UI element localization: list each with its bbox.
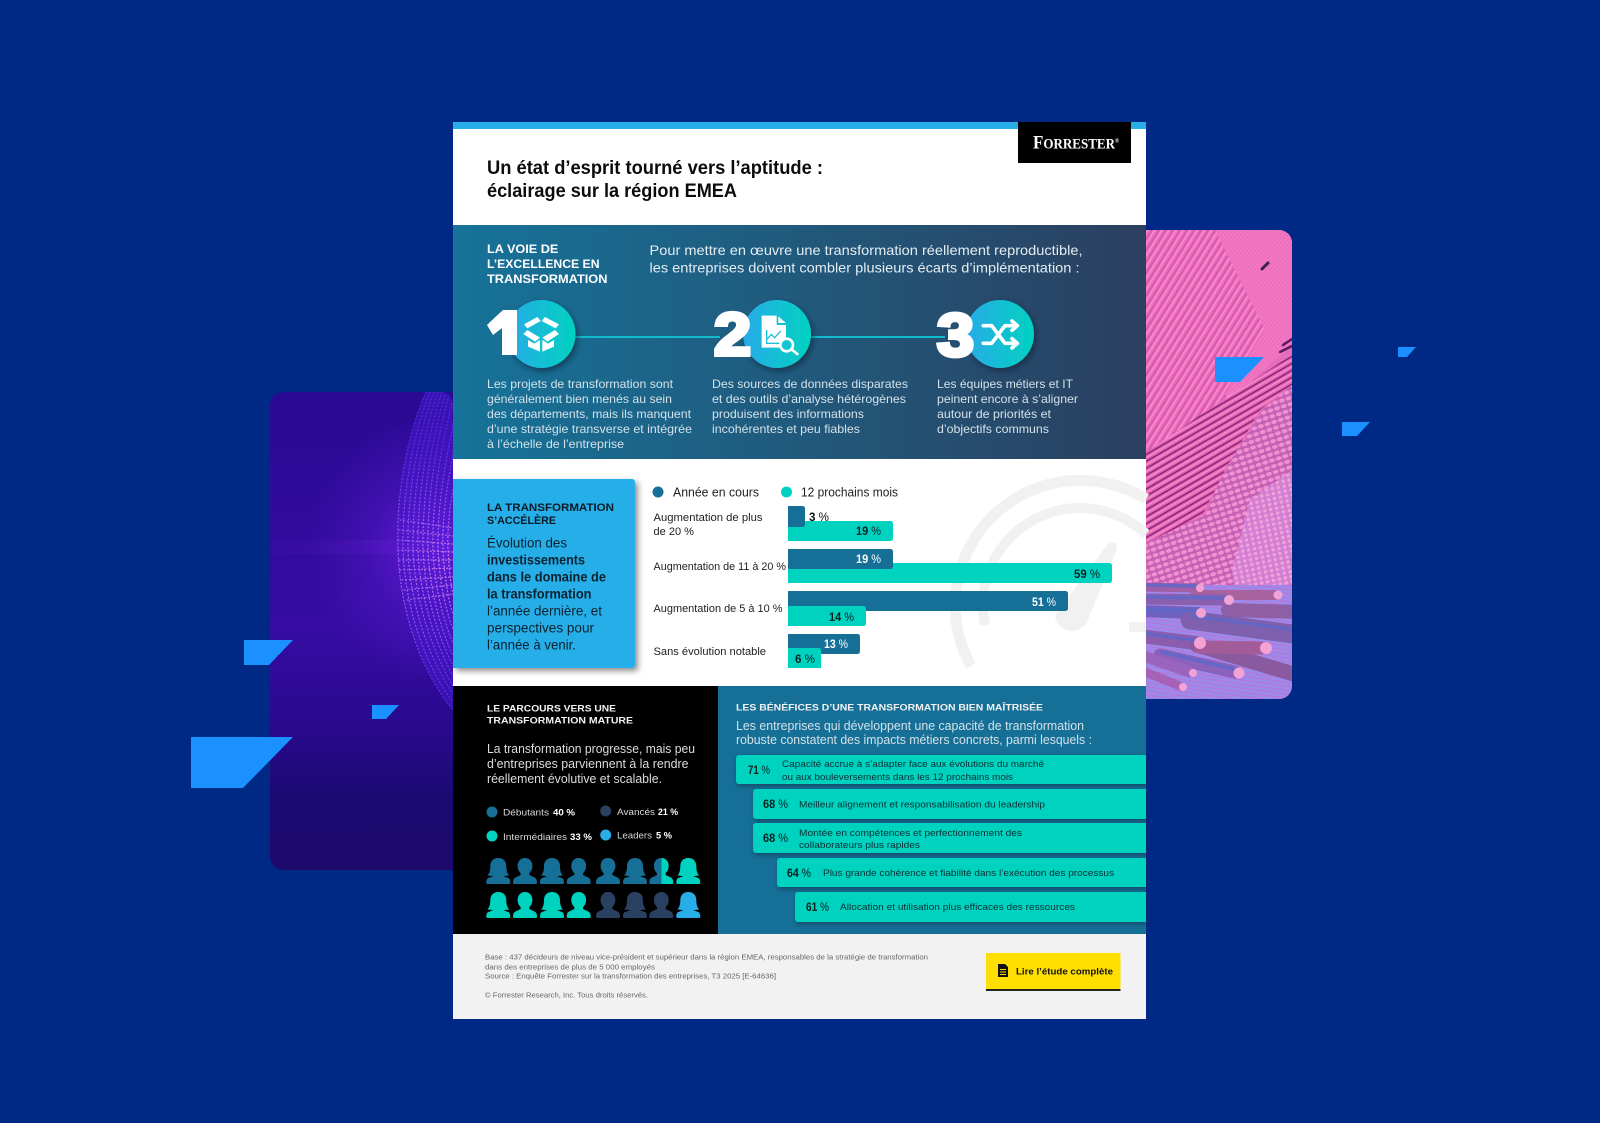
step 1 icon: 1 (487, 301, 517, 368)
benefit labels: Plus grande cohérence et fiabilité dans l’exécution des processus (823, 868, 1114, 879)
row labels (654, 512, 786, 658)
legend: Avancés (617, 807, 655, 818)
bar values (795, 510, 1100, 666)
heading: la voie: TRANSFORMATION (487, 272, 608, 286)
button: read full study (986, 953, 1120, 991)
intro text: les entreprises doivent combler plusieurs écarts d’implémentation : (650, 260, 1080, 276)
benefit labels: Meilleur alignement et responsabilisation du leadership (799, 800, 1045, 810)
bar values: 19 % (856, 552, 881, 566)
footnotes (485, 952, 928, 1000)
step 1 text: Les projets de transformation sont (487, 377, 674, 391)
row labels: Sans évolution notable (654, 646, 766, 658)
legend: 5 % (656, 830, 673, 842)
panel: maturity journey (453, 686, 718, 934)
body text: d’entreprises parviennent à la rendre (487, 757, 689, 771)
benefit labels: Allocation et utilisation plus efficaces des ressources (840, 902, 1075, 913)
legend: 21 % (658, 807, 679, 818)
chart legend: 12 prochains mois (801, 486, 898, 500)
intro text: robuste constatent des impacts métiers concrets, parmi lesquels : (736, 733, 1092, 747)
footnotes: © Forrester Research, Inc. Tous droits réservés. (485, 990, 648, 1000)
bars (788, 521, 893, 541)
intro text (736, 719, 1092, 747)
heading: S’ACCÉLÈRE (487, 514, 556, 527)
intro text: Les entreprises qui développent une capacité de transformation (736, 719, 1084, 733)
step 1 text: à l’échelle de l’entreprise (487, 437, 624, 451)
benefit percentages (748, 765, 829, 914)
body text: dans le domaine de (487, 570, 606, 584)
body text: investissements (487, 552, 585, 568)
body text (487, 536, 606, 652)
body text: la transformation (487, 586, 592, 602)
footnotes: dans des entreprises de plus de 5 000 employés (485, 962, 655, 972)
decorative blue shapes (191, 347, 1416, 788)
bar values: 14 % (829, 610, 854, 624)
step 2 text: produisent des informations (712, 407, 864, 421)
step 3 text: d’objectifs communs (937, 422, 1049, 436)
benefit labels (782, 759, 1114, 913)
bar values: 3 % (809, 510, 829, 524)
benefit labels: collaborateurs plus rapides (799, 840, 920, 851)
connector lines (570, 336, 945, 338)
step 3 icon (937, 300, 1034, 369)
body text: l’année à venir. (487, 638, 576, 652)
step 2 icon: 2 (714, 301, 751, 368)
chart legend (652, 486, 898, 500)
step 3 text (937, 377, 1078, 436)
row labels: Augmentation de 11 à 20 % (654, 561, 786, 573)
legend: Intermédiaires (503, 832, 567, 843)
title: éclairage sur la région EMEA (487, 181, 737, 202)
step 2 text: incohérentes et peu fiables (712, 422, 860, 436)
benefit labels: ou aux bouleversements dans les 12 prochains mois (782, 772, 1013, 783)
row labels: Augmentation de 5 à 10 % (654, 603, 783, 615)
footer (453, 934, 1146, 1019)
button: read full study: Lire l’étude complète (1016, 966, 1113, 978)
bar chart: investment change (654, 506, 1112, 668)
intro text (650, 242, 1082, 276)
legend: 33 % (570, 832, 593, 843)
step 3 icon: 3 (937, 302, 974, 369)
benefit percentages: 71 % (748, 765, 770, 777)
panel: path to transformation excellence (453, 225, 1146, 459)
step 2 text: et des outils d’analyse hétérogènes (712, 392, 906, 406)
step 2 icon (714, 300, 811, 368)
watermark: gauge (955, 480, 1146, 666)
panel: benefits (718, 686, 1146, 934)
panel: right pink image (1146, 230, 1292, 699)
step 1 text: d’une stratégie transverse et intégrée (487, 422, 692, 436)
bar values: 6 % (795, 652, 815, 666)
heading: LA TRANSFORMATION (487, 502, 614, 514)
title: Un état d’esprit tourné vers l’aptitude : (487, 158, 823, 179)
chart legend: Année en cours (673, 486, 759, 500)
benefit percentages: 68 % (763, 799, 788, 811)
body text: Évolution des (487, 536, 567, 550)
legend: 40 % (553, 808, 576, 818)
body text: réellement évolutive et scalable. (487, 772, 662, 786)
heading: LES BÉNÉFICES D’UNE TRANSFORMATION BIEN MAÎTRISÉE (736, 702, 1043, 714)
people icons (486, 858, 700, 918)
title (487, 158, 823, 202)
bar values: 19 % (856, 524, 881, 538)
bar values: 13 % (824, 637, 848, 651)
step 3 text: Les équipes métiers et IT (937, 377, 1074, 391)
step 3 text: peinent encore à s’aligner (937, 392, 1078, 406)
bar values: 51 % (1032, 595, 1056, 609)
body text: La transformation progresse, mais peu (487, 742, 695, 756)
heading: la voie: L’EXCELLENCE EN (487, 257, 600, 271)
step 1 text: des départements, mais ils manquent (487, 407, 692, 421)
benefit percentages: 68 % (763, 833, 788, 845)
benefit percentages: 61 % (806, 902, 829, 914)
step 3 text: autour de priorités et (937, 407, 1052, 421)
step 2 text: Des sources de données disparates (712, 377, 908, 391)
logo: Forrester (1018, 122, 1131, 163)
body text (487, 742, 695, 786)
step 1 icon (487, 300, 576, 368)
heading (487, 502, 614, 527)
body text: l’année dernière, et (487, 604, 602, 618)
panel: left purple image (270, 392, 453, 870)
logo: Forrester: FORRESTER (1033, 132, 1123, 154)
intro text: Pour mettre en œuvre une transformation réellement reproductible, (650, 242, 1082, 258)
step 1 text: généralement bien menés au sein (487, 392, 672, 406)
step 2 text (712, 377, 908, 436)
benefit labels: Capacité accrue à s’adapter face aux évolutions du marché (782, 759, 1044, 770)
heading: la voie (487, 242, 608, 286)
legend: Leaders (617, 830, 652, 842)
legend: Débutants (503, 808, 549, 818)
footnotes: Source : Enquête Forrester sur la transformation des entreprises, T3 2025 [E-64636] (485, 972, 776, 980)
footnotes: Base : 437 décideurs de niveau vice-président et supérieur dans la région EMEA, responsables de la stratégie de transformation (485, 952, 928, 962)
heading: LE PARCOURS VERS UNE (487, 704, 616, 714)
body text: perspectives pour (487, 620, 595, 636)
heading (487, 704, 633, 726)
row labels: de 20 % (654, 526, 694, 538)
page background (453, 122, 1146, 1019)
row labels: Augmentation de plus (654, 512, 763, 524)
top accent bar (453, 122, 1146, 129)
logo: Forrester: ® (1115, 138, 1119, 144)
heading: la voie: LA VOIE DE (487, 242, 558, 256)
legend (486, 806, 679, 843)
benefit bars (736, 755, 1146, 922)
benefit percentages: 64 % (787, 868, 811, 880)
bar values: 59 % (1074, 567, 1100, 581)
tubes (1140, 585, 1300, 686)
benefit labels: Montée en compétences et perfectionnement des (799, 828, 1022, 839)
heading: TRANSFORMATION MATURE (487, 716, 633, 726)
step 1 text (487, 377, 692, 451)
panel: transformation accelerates (453, 479, 635, 668)
